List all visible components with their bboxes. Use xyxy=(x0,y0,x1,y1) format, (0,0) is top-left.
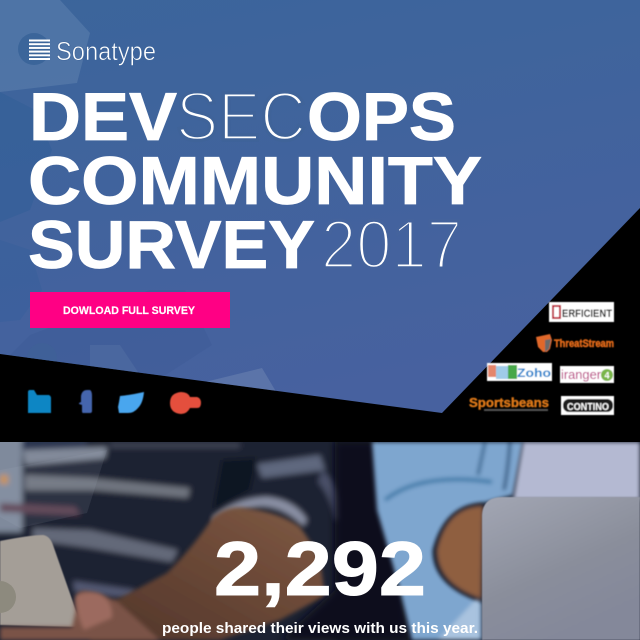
striped shirt xyxy=(0,432,347,640)
logo: iRanger4: 4 xyxy=(604,370,610,380)
icon: facebook xyxy=(79,390,92,413)
logo: multicolour partner xyxy=(487,363,552,381)
partner logos xyxy=(469,302,614,415)
title line 3: 2017 xyxy=(321,206,462,283)
logo: Sonatype xyxy=(18,33,156,66)
title line 1: DEV xyxy=(29,79,177,155)
logo: orange partner wide: Sportsbeans xyxy=(469,395,549,410)
thumb xyxy=(76,592,112,630)
logo: orange partner xyxy=(536,334,614,352)
panel: blue header banner xyxy=(0,0,640,420)
forearm xyxy=(90,507,325,640)
icon: google plus xyxy=(170,392,201,414)
title line 3 xyxy=(28,206,462,283)
phone-side shard overlay xyxy=(0,450,107,528)
icon: twitter xyxy=(118,392,144,413)
title line 1: OPS xyxy=(307,79,456,155)
social icons xyxy=(28,390,201,414)
elbow skin xyxy=(436,505,484,600)
logo: iRanger4 xyxy=(560,366,614,383)
logo: orange partner: ThreatStream xyxy=(554,338,614,350)
background sheet xyxy=(513,442,640,500)
photo background xyxy=(334,442,640,640)
title line 3: SURVEY xyxy=(28,207,315,283)
stat caption: people shared their views with us this year. xyxy=(162,621,478,637)
stat: respondents count: 2,292 xyxy=(214,527,426,612)
logo: iRanger4: iranger xyxy=(561,367,602,382)
logo: Contino xyxy=(561,396,614,415)
logo: Contino: CONTINO xyxy=(567,401,609,413)
logo: multicolour partner: Zoho xyxy=(517,366,551,380)
logo: Perficient: ERFICIENT xyxy=(562,308,612,320)
phone shadow circle xyxy=(0,581,16,613)
title line 1 xyxy=(29,78,456,155)
icon: logo backdrop xyxy=(18,33,50,65)
logo: Perficient xyxy=(549,302,614,322)
phone xyxy=(0,535,80,627)
download button: DOWLOAD FULL SURVEY xyxy=(63,305,196,317)
hand xyxy=(0,591,160,640)
logo wordmark: Sonatype xyxy=(56,36,156,66)
icon: logo stripes xyxy=(29,40,50,60)
denim shirt xyxy=(372,442,523,640)
title line 2: COMMUNITY xyxy=(28,143,482,219)
title line 1: SEC xyxy=(176,78,306,155)
title xyxy=(28,78,482,283)
dark gap beside number xyxy=(280,442,410,640)
icon: linkedin xyxy=(28,390,51,413)
photo: person with phone and laptop xyxy=(0,432,640,640)
laptop xyxy=(482,497,640,640)
download button xyxy=(30,292,230,328)
